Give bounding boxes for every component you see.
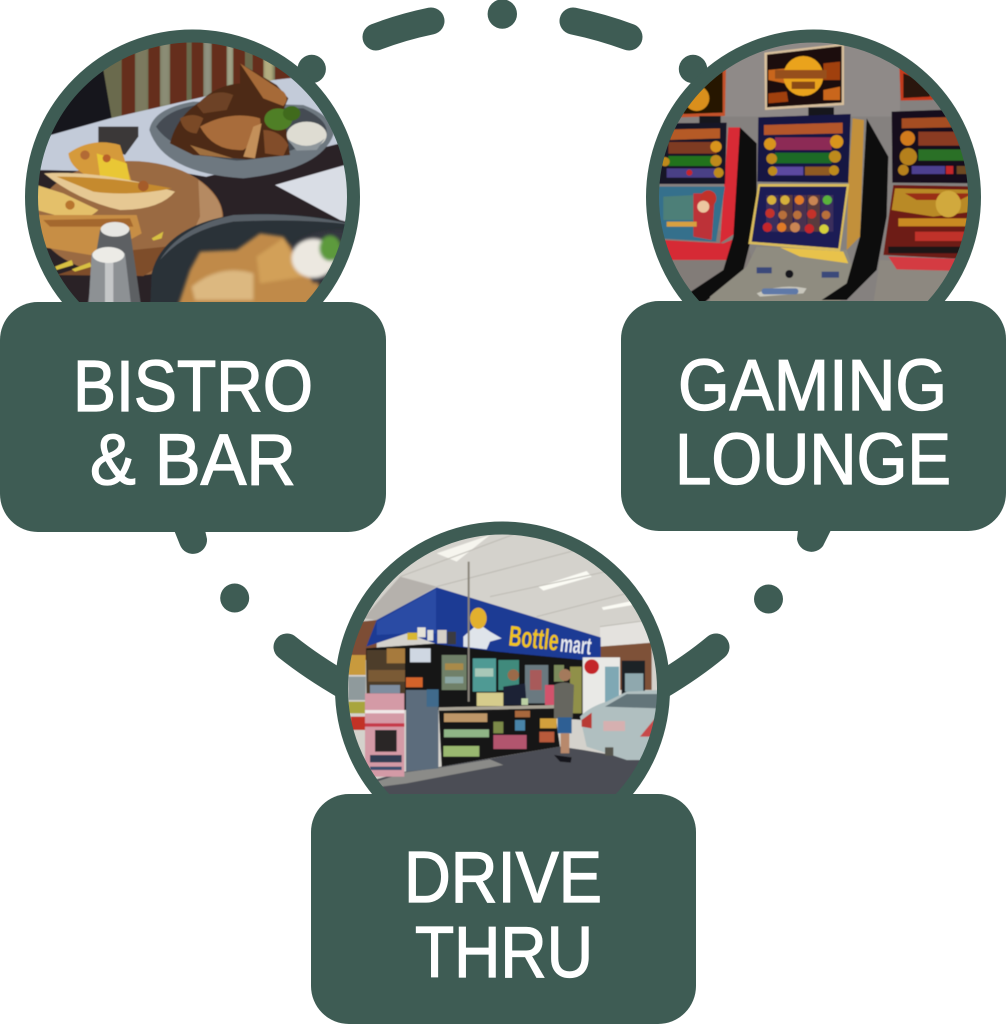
ring: gaming photo frame: [652, 36, 974, 358]
heading: drive: DRIVE: [404, 838, 602, 918]
connector: dashed arc across the top: [298, 0, 707, 83]
ring: drive thru photo frame: [342, 528, 664, 850]
sub-element: white fridges on the right: [583, 657, 645, 714]
label box: drive thru: [311, 794, 696, 1024]
heading: and bar: & BAR: [90, 420, 296, 500]
heading: lounge: LOUNGE: [675, 420, 951, 500]
sub-element: centre machine: [710, 114, 888, 310]
sub-element: wooden board with loaded breads: [37, 127, 223, 276]
sub-element: salt and pepper shakers: [88, 221, 141, 302]
sub-element: staff member: [477, 669, 528, 706]
panel: drive thru: [311, 520, 696, 1024]
connector: right dashes to the drive thru: [660, 530, 831, 686]
ring: bistro photo frame: [32, 36, 354, 358]
photo: plated food on a table: [38, 42, 347, 302]
sub-element: blue bottlemart fascia: [366, 587, 601, 662]
sub-element: counter: [439, 705, 560, 767]
sub-element: shelves and fridges: [348, 643, 601, 730]
label box: gaming lounge: [621, 301, 1006, 531]
sub-element: bowl of chicken wings: [149, 63, 333, 178]
heading: gaming: GAMING: [678, 346, 947, 426]
photo: row of poker machines: [659, 42, 968, 301]
label box: bistro and bar: [0, 302, 386, 532]
sub-element: customer: [545, 669, 574, 763]
connector: left dashes to the drive thru: [174, 530, 345, 686]
sub-element: laptop corner: [274, 164, 347, 222]
sub-element: stacked cartons and cabinet: [365, 689, 439, 777]
sub-element: slot reels: [763, 195, 833, 234]
photo: bottle shop drive through: [348, 534, 657, 794]
label: bottlemart sign suffix: mart: [559, 630, 593, 661]
sub-element: timber fence slats: [122, 40, 295, 120]
sub-element: silver car: [580, 690, 658, 760]
sub-element: pole: [468, 562, 470, 702]
sub-element: brick walls: [352, 620, 378, 660]
panel: bistro and bar: [0, 30, 386, 532]
label: bottlemart sign text: Bottle: [507, 620, 560, 658]
heading: thru: THRU: [415, 913, 593, 993]
panel: gaming lounge: [621, 30, 1006, 531]
sub-element: floor: [376, 746, 640, 794]
sub-element: left machine: [659, 122, 758, 301]
sub-element: front bowl of wedges: [150, 214, 345, 302]
sub-element: right machine: [883, 109, 968, 272]
heading: bistro: BISTRO: [73, 347, 313, 427]
sub-element: top sign, centre: [764, 43, 844, 110]
